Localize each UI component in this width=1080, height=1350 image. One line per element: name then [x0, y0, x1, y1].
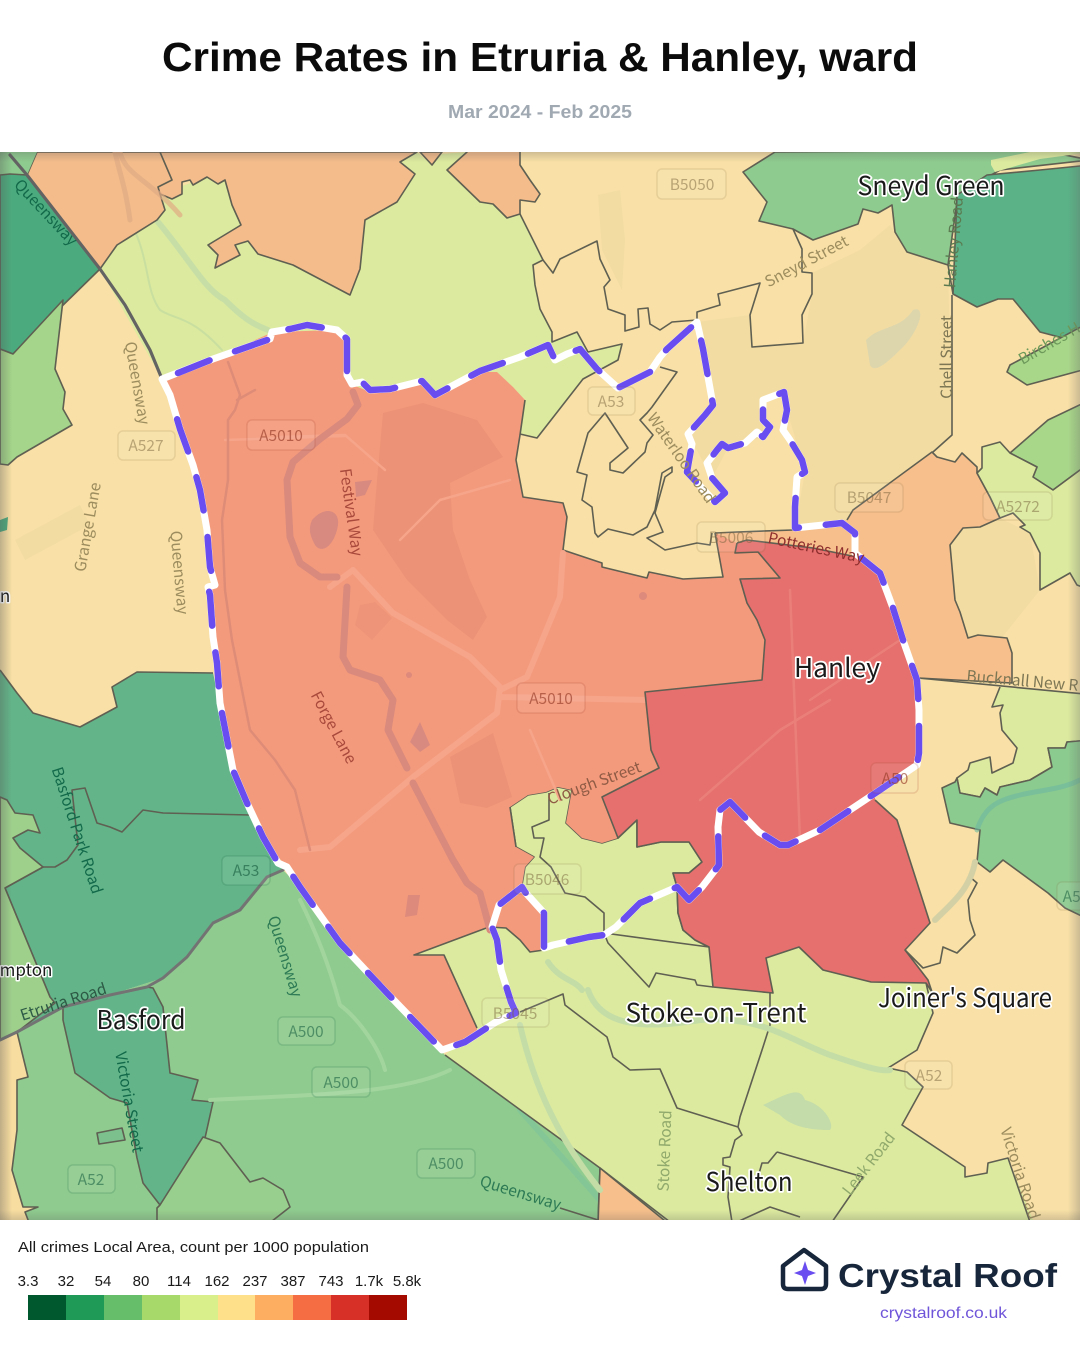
area: orange east	[715, 452, 1012, 683]
place name labels: n	[0, 582, 10, 607]
place name labels: Shelton	[706, 1162, 792, 1199]
area: Basford centre darker green	[63, 987, 213, 1205]
street name labels: Victoria Street	[110, 1050, 150, 1154]
area: mid green far east	[1010, 400, 1080, 490]
road number shields: A50	[882, 767, 908, 789]
legend scale labels: 1.7k	[355, 1273, 384, 1290]
road number shields: A500	[323, 1071, 359, 1093]
ward boundary dashed line	[162, 322, 919, 1050]
area: yellow-green east	[977, 442, 1080, 590]
street name labels: Stoke Road	[652, 1110, 676, 1192]
area: light green west	[0, 300, 72, 465]
park shading in peach area	[688, 225, 952, 528]
road number shields: A500	[288, 1020, 324, 1042]
area: green top right Sneyd Green	[743, 150, 1080, 265]
street name labels: Sneyd Street	[760, 229, 852, 292]
logo: Crystal Roof	[783, 1250, 1058, 1322]
street name labels: Queensway	[477, 1169, 564, 1215]
title: Crime Rates in Etruria & Hanley, ward	[162, 34, 918, 80]
street name labels: Queensway	[10, 174, 83, 250]
legend scale labels: 32	[58, 1273, 74, 1290]
road number shields: A500	[428, 1152, 464, 1174]
legend scale labels: 237	[242, 1273, 268, 1290]
area: mid green lower	[157, 1137, 290, 1225]
roads and stream in the mid green	[210, 900, 450, 1100]
light roads in salmon	[300, 553, 647, 850]
legend scale labels: 54	[95, 1273, 111, 1290]
area: dark green top right	[953, 165, 1080, 345]
legend colour bar	[28, 1295, 407, 1320]
river and lake south	[520, 962, 890, 1190]
road number shields: B5050	[670, 173, 714, 195]
road number shields: A53	[233, 859, 259, 881]
Etruria Road boundary	[0, 870, 283, 1040]
area: dark green Basford	[0, 670, 290, 1040]
place name labels: Stoke-on-Trent	[626, 993, 807, 1030]
area: orange bottom	[597, 1167, 665, 1220]
road number shields: A52	[916, 1064, 942, 1086]
website link: crystalroof.co.uk	[880, 1305, 1008, 1322]
street name labels: Queensway	[120, 340, 156, 426]
area: dark green Queensway	[0, 174, 100, 354]
area: yellow-green blob south of centre	[510, 787, 709, 950]
pond	[866, 309, 920, 368]
road number shields: A5010	[259, 424, 303, 446]
street name labels: Bucknall New R	[966, 664, 1079, 696]
area: mid green south-east	[942, 740, 1080, 920]
road number shields: A53	[598, 390, 624, 412]
place name labels: Basford	[96, 1000, 186, 1037]
street name labels: Waterloo Road	[643, 408, 721, 507]
legend	[18, 1239, 422, 1320]
logo wordmark: Crystal Roof	[838, 1257, 1058, 1294]
Bucknall New Road boundary	[918, 678, 1080, 694]
legend scale labels: 3.3	[18, 1273, 38, 1290]
area: yellow-green south	[414, 927, 1035, 1225]
area: salmon Etruria ward	[162, 330, 780, 1050]
street name labels	[10, 174, 1080, 1222]
road number shields	[68, 169, 1080, 1193]
street name labels: Etruria Road	[17, 977, 109, 1026]
canal north-west	[158, 222, 268, 330]
legend scale labels: 5.8k	[393, 1273, 422, 1290]
area: orange north-west	[27, 152, 417, 295]
place name labels	[0, 166, 1052, 1199]
legend scale labels	[18, 1273, 422, 1290]
street name labels: Grange Lane	[68, 481, 106, 573]
area: light green Birches	[1007, 322, 1080, 385]
area: mid green south-west	[0, 870, 600, 1220]
street name labels: Festival Way	[335, 467, 369, 557]
road number shields: B5045	[493, 1002, 537, 1024]
street name labels: Victoria Road	[995, 1124, 1046, 1222]
road number shields: A5272	[996, 495, 1040, 517]
legend scale labels: 80	[133, 1273, 149, 1290]
place name labels: mpton	[0, 956, 52, 981]
place name labels: Hanley	[794, 648, 880, 685]
area: yellow-green north-west	[102, 152, 621, 437]
legend scale labels: 743	[318, 1273, 344, 1290]
inner ward lines south	[520, 933, 863, 1222]
area: yellow-green south-east	[957, 687, 1080, 797]
area: red Hanley	[602, 540, 932, 993]
street name labels: Clough Street	[544, 755, 644, 809]
map panel	[0, 150, 1080, 1225]
legend title: All crimes Local Area, count per 1000 population	[18, 1239, 369, 1256]
street name labels: Forge Lane	[306, 687, 363, 767]
area: peach strip bottom-left	[0, 1032, 38, 1225]
street name labels: Queensway	[263, 913, 309, 1000]
legend scale labels: 162	[204, 1273, 230, 1290]
place name labels: Sneyd Green	[858, 166, 1004, 203]
road number shields: A527	[128, 434, 164, 456]
ponds in ward	[310, 511, 430, 752]
street name labels: Chell Street	[935, 315, 957, 399]
road number shields: B5047	[847, 486, 891, 508]
peach ward lines north	[543, 229, 953, 452]
darker park in salmon	[377, 408, 498, 606]
street name labels: Queensway	[165, 530, 195, 615]
road number shields: A52	[78, 1168, 104, 1190]
street name labels: Potteries Way	[766, 526, 866, 568]
street name labels: Basford Park Road	[47, 764, 109, 896]
boundary road Queensway	[10, 155, 162, 379]
area: light green far west	[0, 797, 55, 1040]
road number shields: B5046	[525, 868, 569, 890]
peach ward lines centre	[577, 367, 712, 550]
area: green top-left corner	[0, 152, 37, 175]
map edge shading	[0, 152, 1080, 1220]
legend scale labels: 387	[280, 1273, 306, 1290]
subtitle: date range: Mar 2024 - Feb 2025	[448, 102, 632, 122]
canal through ward	[287, 392, 490, 930]
street name labels: Hanley Road	[938, 196, 968, 289]
legend scale labels: 114	[167, 1273, 191, 1290]
street name labels: Leek Road	[837, 1127, 900, 1199]
place name labels: Joiner's Square	[878, 978, 1052, 1015]
road number shields: A5010	[529, 687, 573, 709]
icon: house with star	[783, 1250, 826, 1289]
road number shields: B5006	[709, 526, 753, 548]
